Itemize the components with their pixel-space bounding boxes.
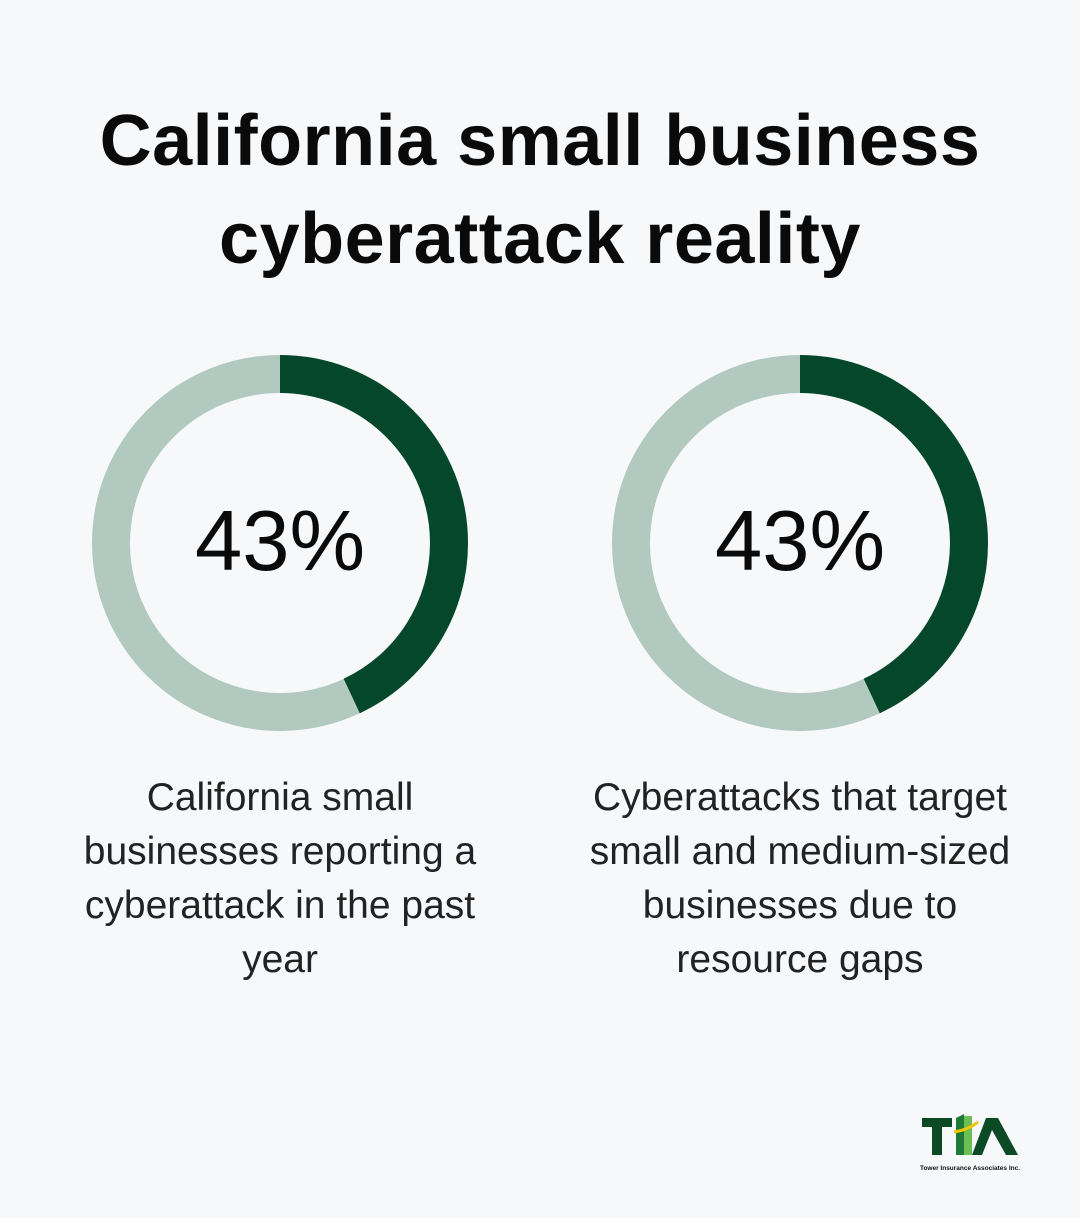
caption: left: year	[242, 938, 318, 981]
title	[100, 101, 980, 279]
caption: right: businesses due to	[643, 884, 957, 927]
title: California small business	[100, 101, 980, 181]
caption: right: small and medium-sized	[590, 830, 1010, 873]
caption: right: resource gaps	[676, 938, 924, 981]
logo: Tower Insurance Associates Inc.	[920, 1165, 1020, 1172]
donut chart: right	[612, 355, 988, 731]
caption: left: cyberattack in the past	[85, 884, 475, 927]
caption: left: businesses reporting a	[84, 830, 476, 873]
donut chart: left	[92, 355, 468, 731]
caption: right: Cyberattacks that target	[593, 776, 1007, 819]
caption: right	[590, 776, 1010, 981]
caption: left	[84, 776, 476, 981]
logo	[920, 1114, 1020, 1172]
caption: left: California small	[147, 776, 413, 819]
donut chart: right: 43%	[715, 494, 885, 589]
donut chart: left: 43%	[195, 494, 365, 589]
title: cyberattack reality	[219, 199, 861, 279]
